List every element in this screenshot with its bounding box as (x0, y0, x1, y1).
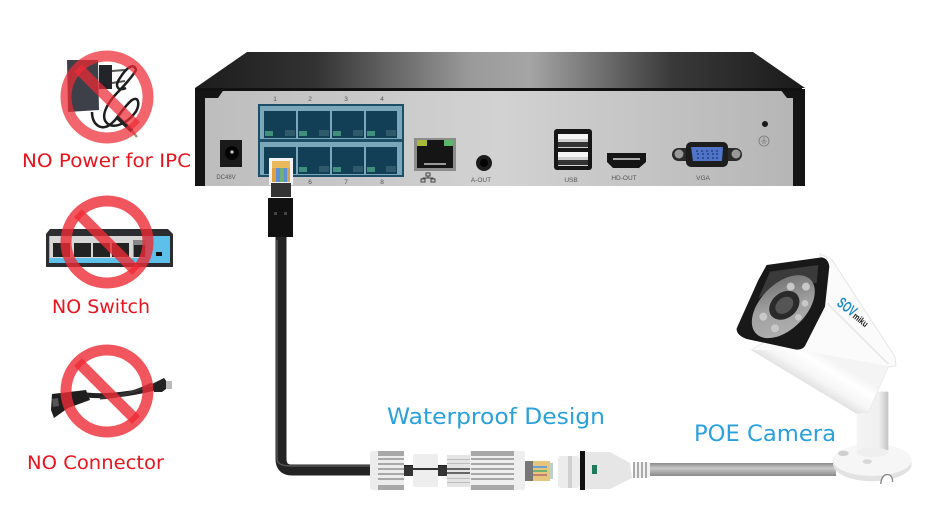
connector illustration (51, 378, 172, 418)
port numbers: 4 (380, 96, 384, 103)
prohibition sign (66, 201, 148, 283)
sealing nut (370, 451, 404, 490)
port numbers: 6 (308, 179, 312, 186)
ethernet cable (277, 236, 372, 470)
VGA port (672, 142, 742, 182)
HDMI port (607, 153, 646, 182)
label: no power: NO Power for IPC (22, 151, 191, 172)
NVR left bracket (195, 88, 225, 186)
NVR recorder rear view (195, 52, 805, 186)
camera underside shadow (752, 350, 888, 413)
port numbers: 1 (273, 96, 277, 103)
NVR rear panel (200, 90, 800, 186)
DC power socket (216, 140, 242, 181)
prohibited item: network switch (46, 201, 173, 318)
port numbers (273, 96, 384, 186)
waterproof connector assembly (370, 451, 836, 490)
camera cable (650, 463, 836, 476)
camera side crease (827, 303, 888, 364)
bezel inner wall (758, 265, 818, 298)
port numbers: 7 (344, 179, 348, 186)
network icon (421, 173, 435, 182)
rubber gasket (413, 454, 438, 487)
IR LED ring (740, 264, 826, 350)
prohibited item: power adapter (22, 56, 191, 172)
audio out jack: A-OUT (471, 177, 491, 184)
heading: POE camera: POE Camera (694, 421, 836, 447)
audio out jack (471, 155, 492, 184)
IR LEDs (759, 283, 810, 332)
adapter illustration (67, 60, 138, 137)
prohibited item: PoE connector (27, 350, 172, 474)
heading: waterproof design: Waterproof Design (387, 404, 605, 430)
NVR right bracket (780, 89, 805, 186)
lens (763, 285, 805, 326)
PoE port block (258, 104, 404, 177)
coupling body (470, 451, 525, 490)
VGA port: VGA (696, 175, 711, 182)
camera stand (833, 392, 912, 484)
port numbers: 2 (308, 96, 312, 103)
DC power socket: DC48V (216, 175, 236, 181)
bullet camera (737, 254, 912, 484)
switch illustration (46, 229, 173, 267)
camera front bezel (737, 257, 829, 350)
port numbers: 8 (380, 179, 384, 186)
inner cable (404, 465, 448, 476)
prohibition sign (66, 350, 148, 432)
camera-side socket (558, 451, 650, 490)
RJ45 plug (268, 158, 293, 237)
reset hole (762, 121, 768, 127)
camera body (752, 254, 896, 413)
threaded sleeve (447, 455, 471, 487)
USB ports (554, 129, 592, 184)
label: no switch: NO Switch (52, 297, 150, 318)
RJ45 end (525, 461, 553, 481)
label: no connector: NO Connector (27, 453, 164, 474)
port numbers: 3 (344, 96, 348, 103)
USB ports: USB (564, 177, 578, 184)
NVR top cover (195, 52, 805, 88)
prohibition sign (66, 56, 148, 138)
brand logo: SOV (834, 295, 860, 321)
HDMI port: HD-OUT (611, 175, 637, 182)
ground symbol (759, 136, 769, 146)
brand logo: miku (851, 311, 870, 329)
LAN port (414, 138, 456, 171)
